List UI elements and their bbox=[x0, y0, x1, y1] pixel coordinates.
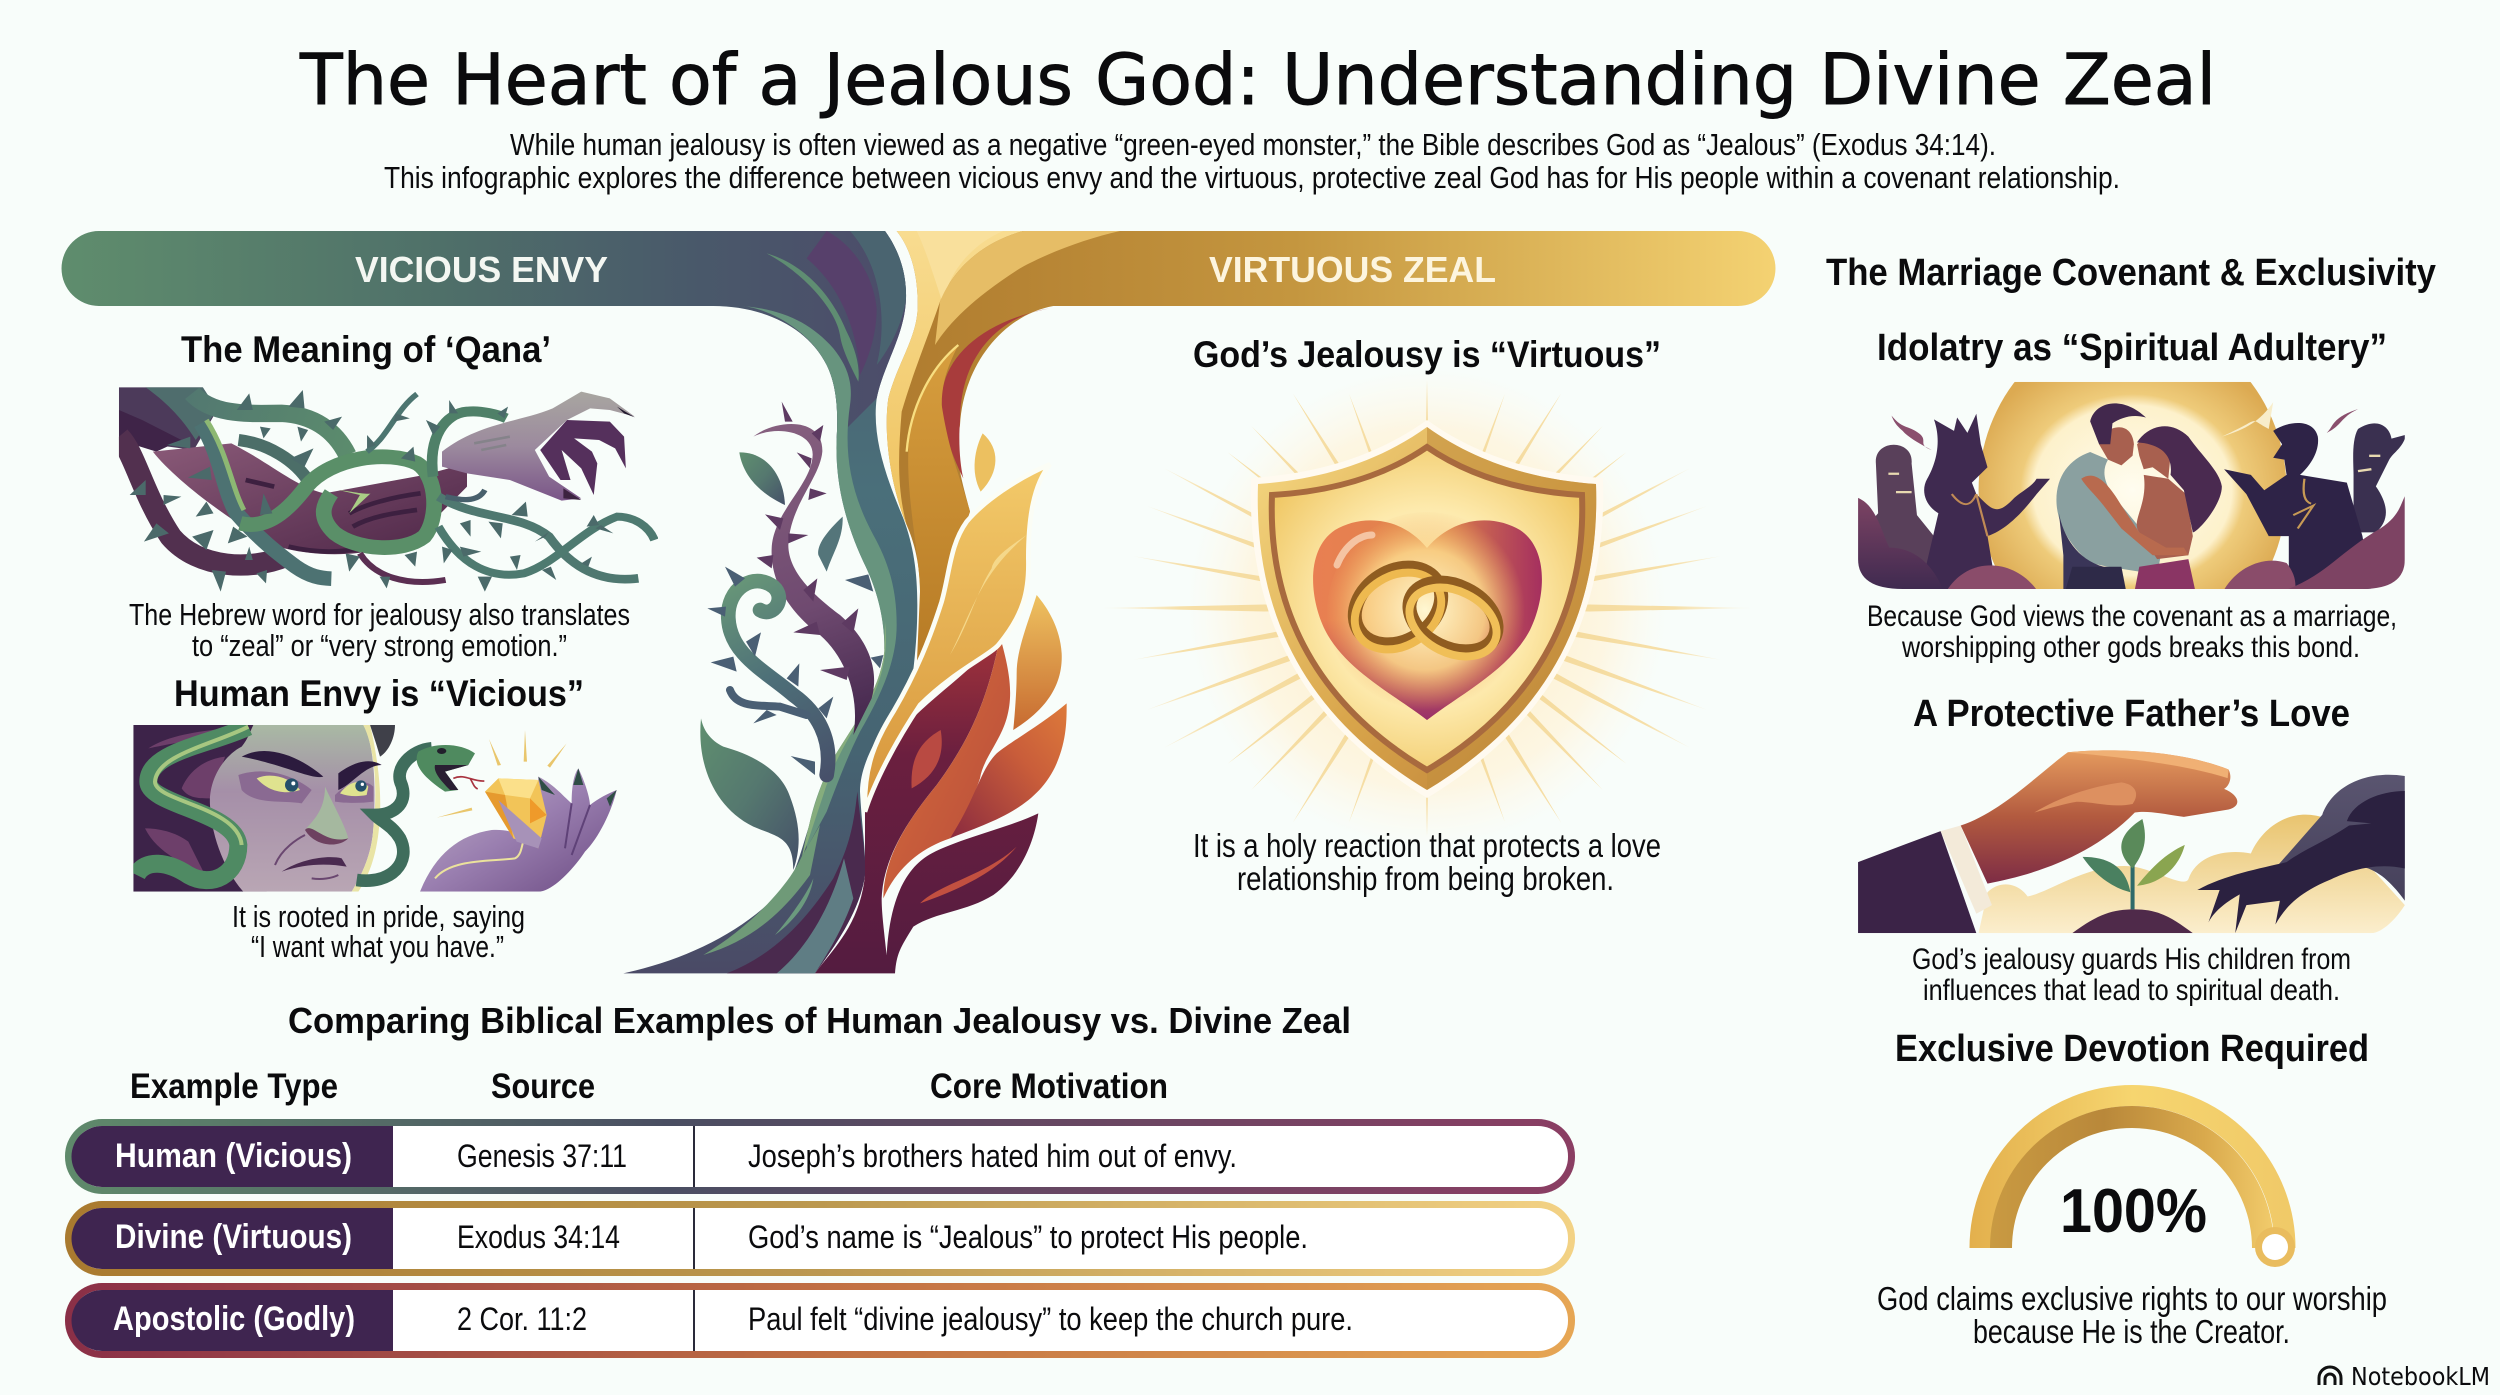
heading: idolatry: Idolatry as “Spiritual Adultery” bbox=[1877, 327, 2387, 369]
queen figure bbox=[1892, 414, 2050, 590]
thorn branch: green bbox=[707, 567, 883, 775]
text: holy reaction bbox=[1193, 827, 1661, 897]
flame: small spark bbox=[975, 433, 995, 492]
envious hand bbox=[420, 768, 617, 892]
heading: human envy: Human Envy is “Vicious” bbox=[174, 673, 584, 714]
idol left bbox=[1876, 444, 1934, 564]
text: qana translation bbox=[129, 597, 630, 663]
leaf: small side bbox=[818, 517, 843, 572]
glowing ground bbox=[1979, 815, 2405, 933]
text: exclusive rights bbox=[1877, 1280, 2387, 1350]
illustration: thorns gripping an arm bbox=[119, 387, 654, 592]
flame: crimson body bbox=[815, 637, 1038, 973]
sparkle rays bbox=[437, 730, 567, 818]
shield bbox=[1251, 420, 1603, 798]
gauge: 100 percent bbox=[1980, 1095, 2295, 1267]
clouds left bbox=[1858, 498, 1943, 590]
text: envy rooted in pride bbox=[232, 899, 525, 964]
table row: apostolic: Apostolic (Godly) bbox=[113, 1300, 355, 1338]
table row: divine: Exodus 34:14 bbox=[457, 1219, 620, 1255]
illustration: couple surrounded by false gods bbox=[1858, 382, 2405, 589]
table row: divine bbox=[65, 1201, 1575, 1276]
subtitle: While human jealousy is often viewed as a negative “green-eyed monster,” the Bible describes God as “Jealous” (Exodus 34:14). bbox=[510, 127, 1996, 162]
table column headers: Example Type bbox=[130, 1067, 338, 1106]
heading: exclusive devotion: Exclusive Devotion Required bbox=[1895, 1028, 2369, 1070]
text: covenant as marriage bbox=[1867, 600, 2397, 664]
suit sleeve bbox=[1858, 831, 1976, 933]
text: covenant as marriage: Because God views the covenant as a marriage, bbox=[1867, 600, 2397, 633]
table column headers: Source bbox=[491, 1067, 595, 1106]
table row: human bbox=[65, 1119, 1575, 1194]
serpent bbox=[357, 745, 484, 881]
heading: gods jealousy: God’s Jealousy is “Virtuous” bbox=[1193, 334, 1661, 375]
central illustration: thorn vine and golden flame bbox=[623, 231, 1120, 973]
thorns bbox=[130, 390, 613, 592]
banner: virtuous zeal bbox=[1100, 231, 1775, 306]
golden flame ribbon bbox=[887, 231, 1120, 668]
hair bbox=[133, 725, 395, 892]
table row: apostolic: Paul felt “divine jealousy” to keep the church pure. bbox=[748, 1301, 1353, 1337]
couple bbox=[2056, 403, 2222, 590]
dark smoke bbox=[2273, 775, 2405, 901]
table row: human: Joseph’s brothers hated him out of envy. bbox=[748, 1138, 1237, 1174]
vine stem bbox=[623, 231, 917, 973]
text: qana translation: to “zeal” or “very strong emotion.” bbox=[192, 628, 567, 663]
illustration: shield with heart and rings bbox=[1099, 368, 1755, 848]
table column headers bbox=[130, 1067, 1168, 1106]
clawed hand bbox=[442, 392, 635, 501]
protecting hand bbox=[1961, 750, 2237, 884]
table heading: Comparing Biblical Examples of Human Jealousy vs. Divine Zeal bbox=[288, 1000, 1351, 1041]
flame: orange leaf bbox=[950, 703, 1067, 838]
shirt cuff bbox=[1941, 825, 1992, 914]
text: exclusive rights: God claims exclusive rights to our worship bbox=[1877, 1280, 2387, 1317]
table row: human: Genesis 37:11 bbox=[457, 1138, 627, 1174]
table row: apostolic: 2 Cor. 11:2 bbox=[457, 1301, 587, 1337]
text: guards children: God’s jealousy guards His children from bbox=[1912, 943, 2351, 976]
text: qana translation: The Hebrew word for jealousy also translates bbox=[129, 597, 630, 632]
banner: vicious envy bbox=[62, 231, 725, 306]
table row: divine: God’s name is “Jealous” to protect His people. bbox=[748, 1219, 1308, 1255]
flame: amber leaf bbox=[1013, 595, 1062, 730]
leaf: large lower bbox=[700, 718, 799, 870]
clouds right bbox=[2224, 561, 2296, 590]
text: guards children bbox=[1912, 943, 2351, 1007]
text: covenant as marriage: worshipping other gods breaks this bond. bbox=[1901, 631, 2360, 664]
banner: vicious envy: VICIOUS ENVY bbox=[355, 249, 608, 290]
idol and figure right bbox=[2224, 409, 2406, 590]
flame: golden leaf bbox=[865, 464, 1050, 812]
forearm bbox=[153, 443, 467, 554]
table column headers: Core Motivation bbox=[930, 1067, 1168, 1106]
text: exclusive rights: because He is the Creator. bbox=[1973, 1313, 2290, 1350]
radiating rays bbox=[1099, 368, 1755, 848]
soil mound bbox=[2072, 909, 2193, 933]
heart bbox=[1313, 512, 1542, 720]
gem bbox=[485, 778, 547, 848]
text: holy reaction: It is a holy reaction that protects a love bbox=[1193, 827, 1661, 864]
text: holy reaction: relationship from being broken. bbox=[1237, 860, 1614, 897]
heading: protective father: A Protective Father’s Love bbox=[1913, 693, 2350, 735]
text: guards children: influences that lead to spiritual death. bbox=[1923, 974, 2340, 1007]
subtitle: This infographic explores the difference between vicious envy and the virtuous, protective zeal God has for His people within a covenant relationship. bbox=[384, 160, 2120, 195]
banner: virtuous zeal: VIRTUOUS ZEAL bbox=[1209, 249, 1496, 290]
text: envy rooted in pride: “I want what you have.” bbox=[251, 929, 504, 964]
face bbox=[210, 725, 382, 892]
golden halo bbox=[1978, 382, 2286, 589]
illustration: protective hand over seedling bbox=[1858, 750, 2405, 933]
illustration: envious face, serpent and gem bbox=[133, 725, 617, 892]
subtitle bbox=[384, 127, 2120, 195]
shadow claw bbox=[2197, 791, 2405, 933]
table row: divine: Divine (Virtuous) bbox=[115, 1218, 352, 1256]
serpent strand bbox=[137, 727, 248, 880]
table row: apostolic bbox=[65, 1283, 1575, 1358]
gauge: 100 percent: 100% bbox=[2060, 1177, 2207, 1246]
seedling bbox=[2083, 819, 2185, 909]
table row: human: Human (Vicious) bbox=[115, 1137, 352, 1175]
heading: marriage covenant: The Marriage Covenant & Exclusivity bbox=[1826, 252, 2436, 294]
text: envy rooted in pride: It is rooted in pride, saying bbox=[232, 899, 525, 934]
leaf: small top bbox=[739, 452, 785, 505]
title: The Heart of a Jealous God: Understanding Divine Zeal bbox=[299, 39, 2216, 121]
heading: meaning of qana: The Meaning of ‘Qana’ bbox=[181, 329, 551, 370]
green thorn vines bbox=[192, 393, 654, 582]
wedding rings bbox=[1340, 552, 1508, 670]
thorn branch: purple bbox=[753, 402, 874, 735]
